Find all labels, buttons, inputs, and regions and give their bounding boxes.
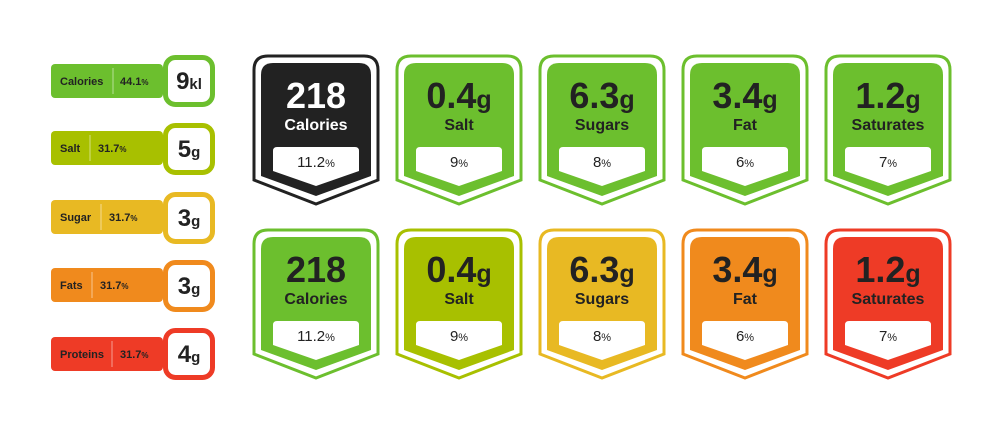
bar: proteins — [51, 330, 212, 378]
bar: fats: 3g — [178, 273, 200, 300]
badge: salt lime — [397, 230, 521, 378]
badge: saturates green: Saturates — [852, 117, 925, 134]
badge: fat orange: 6% — [736, 328, 754, 345]
badge: calories green — [254, 230, 378, 378]
badge: calories dark: 218 — [286, 75, 346, 116]
badge: saturates green — [826, 56, 950, 204]
badge: salt lime: Salt — [444, 291, 474, 308]
badge: salt green: 0.4g — [426, 75, 492, 116]
badge: saturates red: 7% — [879, 328, 897, 345]
bar: sugar — [51, 194, 212, 242]
badge: sugars yellow: 6.3g — [569, 249, 635, 290]
bar: sugar: 31.7% — [109, 212, 138, 224]
badge: sugars yellow: 8% — [593, 328, 611, 345]
bar: salt: Salt — [60, 143, 81, 155]
badge: sugars green: Sugars — [575, 117, 629, 134]
bar: fats — [51, 262, 212, 310]
badge: calories green: 11.2% — [297, 328, 335, 345]
bar: salt — [51, 126, 212, 172]
bar: calories: 9kl — [176, 68, 202, 95]
badge: salt lime: 0.4g — [426, 249, 492, 290]
badge: sugars green: 6.3g — [569, 75, 635, 116]
bar: calories: Calories — [60, 76, 103, 88]
badge: fat green — [683, 56, 807, 204]
badge: fat orange: 3.4g — [712, 249, 778, 290]
bar: proteins: 31.7% — [120, 349, 149, 361]
badge: calories dark: 11.2% — [297, 154, 335, 171]
bar: calories — [51, 58, 212, 104]
badge: fat orange: Fat — [733, 291, 758, 308]
badge: saturates red — [826, 230, 950, 378]
badge: fat green: 3.4g — [712, 75, 778, 116]
badge: saturates green: 1.2g — [855, 75, 921, 116]
bar: sugar: Sugar — [60, 212, 92, 224]
badge: salt green — [397, 56, 521, 204]
badge: saturates red: Saturates — [852, 291, 925, 308]
badge: fat orange — [683, 230, 807, 378]
bar: calories: 44.1% — [120, 76, 149, 88]
badge: calories green: Calories — [284, 291, 348, 308]
bar: proteins: Proteins — [60, 349, 104, 361]
badge: sugars green — [540, 56, 664, 204]
badge: sugars yellow: Sugars — [575, 291, 629, 308]
badge: salt green: Salt — [444, 117, 474, 134]
bar: sugar: 3g — [178, 205, 200, 232]
bar: fats: 31.7% — [100, 280, 129, 292]
badge: fat green: Fat — [733, 117, 758, 134]
badge: sugars green: 8% — [593, 154, 611, 171]
badge: saturates red: 1.2g — [855, 249, 921, 290]
badge: salt green: 9% — [450, 154, 468, 171]
badge: calories dark — [254, 56, 378, 204]
bar: salt: 31.7% — [98, 143, 127, 155]
badge: salt lime: 9% — [450, 328, 468, 345]
bar: salt: 5g — [178, 136, 200, 163]
badge: calories dark: Calories — [284, 117, 348, 134]
badge: calories green: 218 — [286, 249, 346, 290]
badge: fat green: 6% — [736, 154, 754, 171]
bar: fats: Fats — [60, 280, 83, 292]
bar: proteins: 4g — [178, 341, 200, 368]
badge: saturates green: 7% — [879, 154, 897, 171]
badge: sugars yellow — [540, 230, 664, 378]
